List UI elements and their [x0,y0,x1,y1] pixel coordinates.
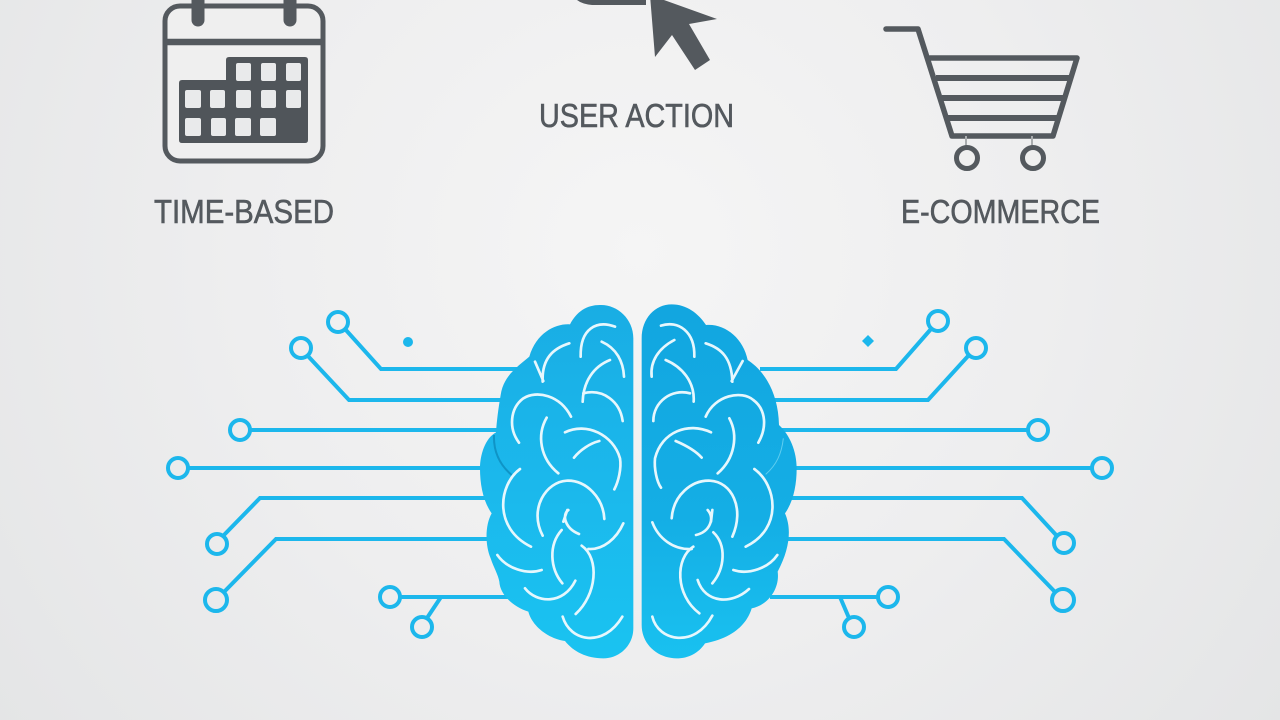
icon: mouse cursor [577,0,717,70]
brain: right hemisphere [642,304,797,658]
brain: left hemisphere [480,305,633,658]
circuit lines: left [168,312,520,637]
icon: calendar [165,0,323,161]
label: user action: USER ACTION [539,97,734,134]
label: time-based: TIME-BASED [154,193,334,230]
circuit lines: right [760,311,1112,637]
label: e-commerce: E-COMMERCE [901,193,1100,230]
icon: shopping cart [886,29,1077,168]
